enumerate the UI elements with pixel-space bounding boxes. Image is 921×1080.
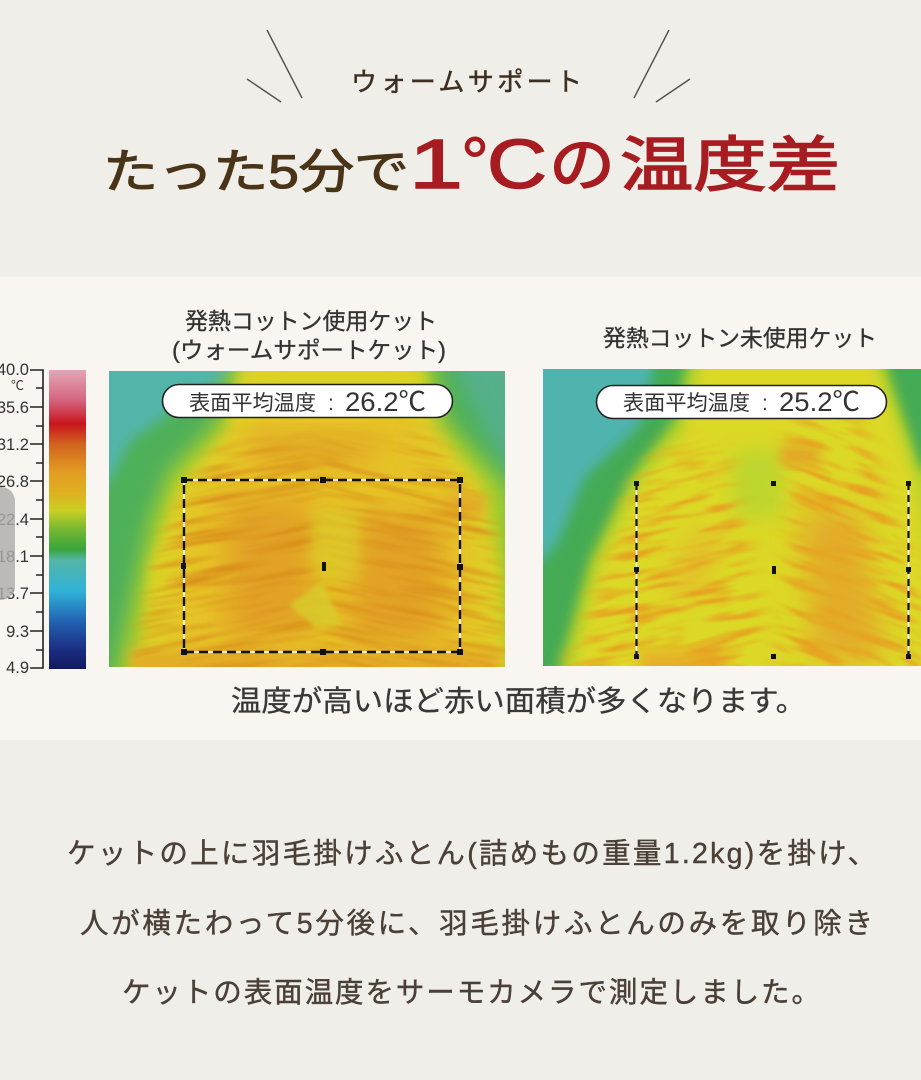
title dark part: たった5分で: [103, 145, 409, 198]
right thermal image heading: 発熱コットン未使用ケット: [603, 325, 877, 351]
right measurement frame: [634, 481, 911, 659]
grey overlay tab at left edge: [0, 487, 15, 600]
left temperature pill: 26.2℃: [345, 387, 426, 417]
scale colour bar: [49, 370, 86, 669]
left thermal image: [109, 371, 505, 667]
white band panel: [0, 277, 921, 740]
left thermal image heading: (ウォームサポートケット): [172, 337, 446, 363]
scale axis: [30, 370, 43, 668]
scale labels: ℃: [11, 378, 24, 393]
explanatory paragraph: 人が横たわって5分後に、羽毛掛けふとんのみを取り除き: [80, 908, 873, 940]
explanatory paragraph: ケットの上に羽毛掛けふとん(詰めもの重量1.2kg)を掛け、: [67, 838, 876, 870]
title red part: 温度差: [620, 132, 840, 199]
temperature scale: [0, 361, 86, 677]
right temperature pill: 25.2℃: [779, 387, 860, 417]
title red part: C: [487, 125, 547, 203]
title red part: の: [549, 132, 615, 199]
burst lines left: [247, 30, 302, 102]
right temperature pill: [596, 386, 886, 418]
left temperature pill: 表面平均温度: [189, 392, 316, 415]
scale labels: [0, 361, 29, 677]
title: [103, 123, 840, 203]
title red part: °: [461, 123, 489, 201]
left temperature pill: [162, 384, 452, 418]
left measurement frame: [181, 477, 463, 655]
right thermal image: [543, 369, 921, 666]
left temperature pill: :: [328, 392, 334, 415]
explanatory paragraph: [67, 838, 876, 1009]
left thermal image heading: 発熱コットン使用ケット: [185, 308, 437, 334]
scale labels: 4.9: [6, 659, 29, 677]
right temperature pill: 表面平均温度: [623, 392, 750, 415]
thermal caption: 温度が高いほど赤い面積が多くなります。: [231, 685, 806, 718]
right temperature pill: :: [762, 392, 768, 415]
scale labels: 9.3: [6, 623, 29, 641]
left thermal image heading: [172, 308, 446, 363]
explanatory paragraph: ケットの表面温度をサーモカメラで測定しました。: [122, 977, 820, 1009]
title red part: 1: [409, 125, 463, 203]
eyebrow: ウォームサポート: ウォームサポート: [351, 67, 582, 97]
burst lines right: [634, 30, 690, 102]
title red part: [409, 123, 840, 203]
